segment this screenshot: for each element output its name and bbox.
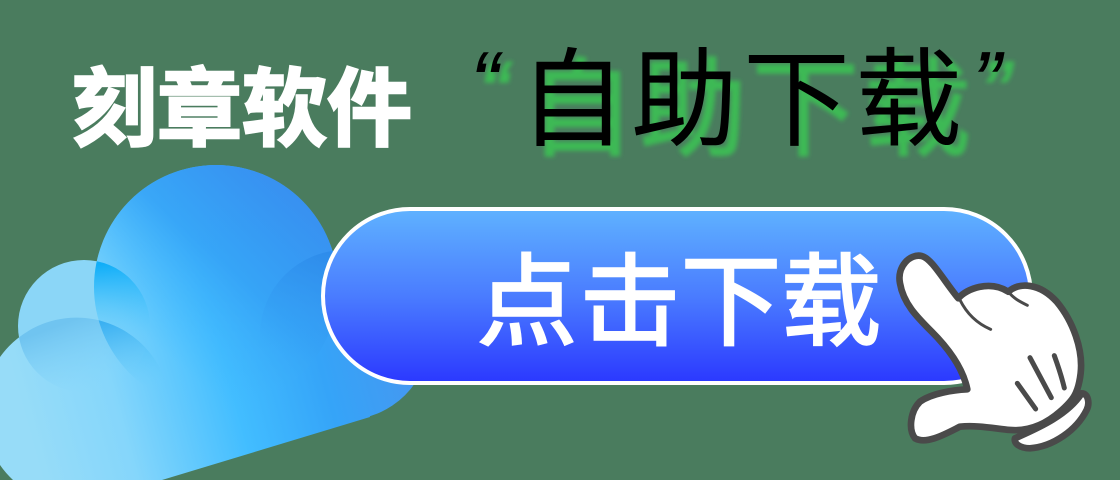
button label: 点击下载 <box>477 247 881 359</box>
text shadow: 自助下载 <box>528 23 971 178</box>
text: 自助下载 <box>519 13 962 168</box>
icon: pointing hand <box>899 256 1088 448</box>
heading: self-service download <box>470 13 1014 178</box>
text shadow: ” <box>981 43 1014 142</box>
text: ” <box>972 33 1005 132</box>
heading: burning software: 刻章软件 <box>72 63 412 158</box>
icon: cloud <box>0 165 430 480</box>
text: “ <box>470 33 504 132</box>
glove lines <box>1017 356 1064 409</box>
hand body <box>899 256 1081 440</box>
finger creases <box>960 292 1027 329</box>
hand cuff <box>1015 393 1088 448</box>
button <box>323 209 1031 383</box>
text shadow: “ <box>479 43 513 142</box>
